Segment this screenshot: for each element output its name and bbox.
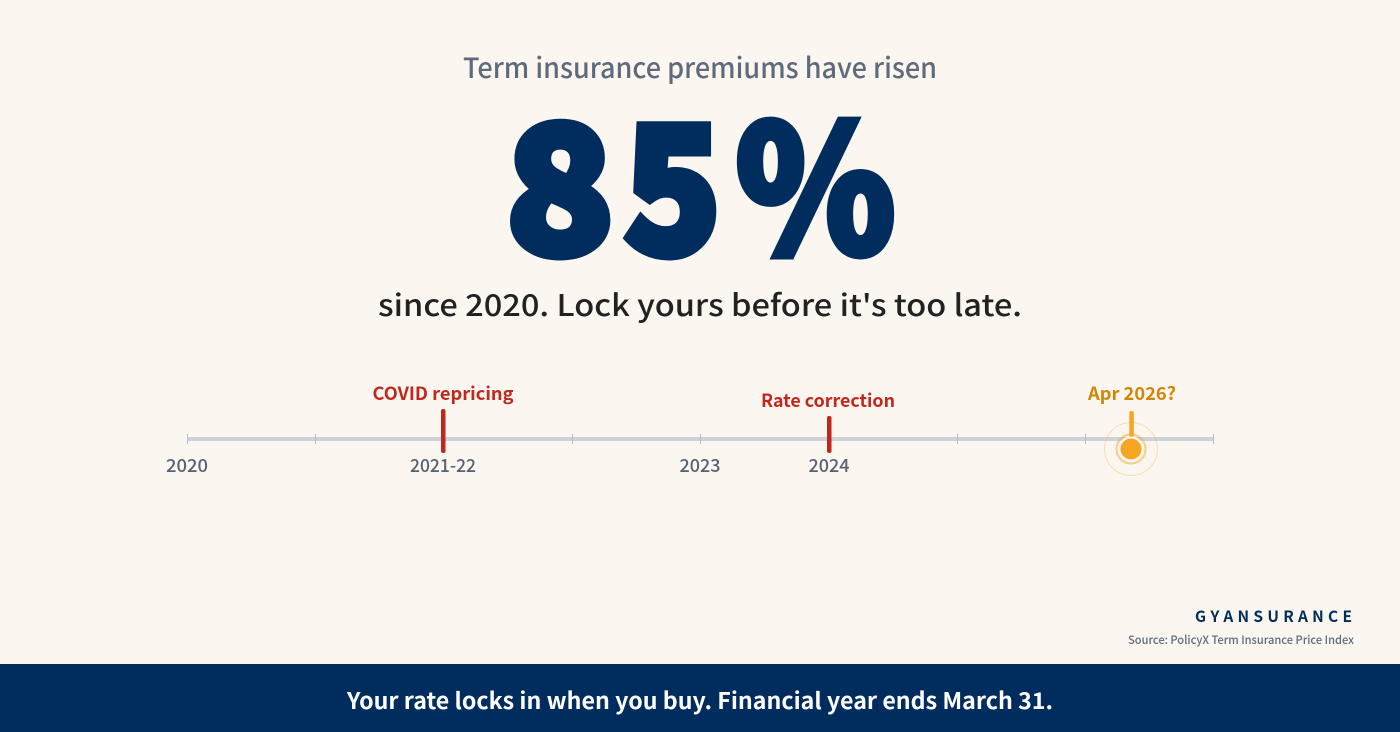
headline figure: 85%: 5 — [624, 50, 721, 304]
marker: Rate correction: Rate correction — [761, 387, 895, 413]
year labels: 2020 — [166, 452, 208, 478]
subtitle: term insurance premiums: Term insurance premiums have risen — [463, 47, 937, 87]
timeline axis — [187, 434, 1214, 444]
footer banner: Your rate locks in when you buy. Financial year ends March 31. — [346, 682, 1053, 716]
headline figure: 85%: % — [736, 50, 896, 304]
year labels: 2024 — [808, 452, 850, 478]
marker: Apr 2026 pulsing dot — [1087, 380, 1176, 476]
footer banner — [0, 664, 1400, 732]
marker: COVID repricing — [372, 380, 514, 453]
year labels — [166, 452, 850, 478]
supporting line: since 2020. Lock yours before it's too late. — [378, 281, 1022, 325]
source note: Source: PolicyX Term Insurance Price Index — [1128, 632, 1354, 648]
year labels: 2023 — [680, 452, 720, 478]
headline figure: 85%: 8 — [506, 50, 614, 304]
marker: COVID repricing: COVID repricing — [372, 380, 514, 406]
timeline chart — [166, 380, 1214, 478]
headline figure: 85% — [506, 50, 896, 304]
marker: Rate correction — [761, 387, 895, 453]
brand name: GYANSURANCE — [1195, 605, 1352, 627]
marker: Apr 2026 pulsing dot: Apr 2026? — [1087, 380, 1176, 406]
year labels: 2021-22 — [410, 452, 476, 478]
